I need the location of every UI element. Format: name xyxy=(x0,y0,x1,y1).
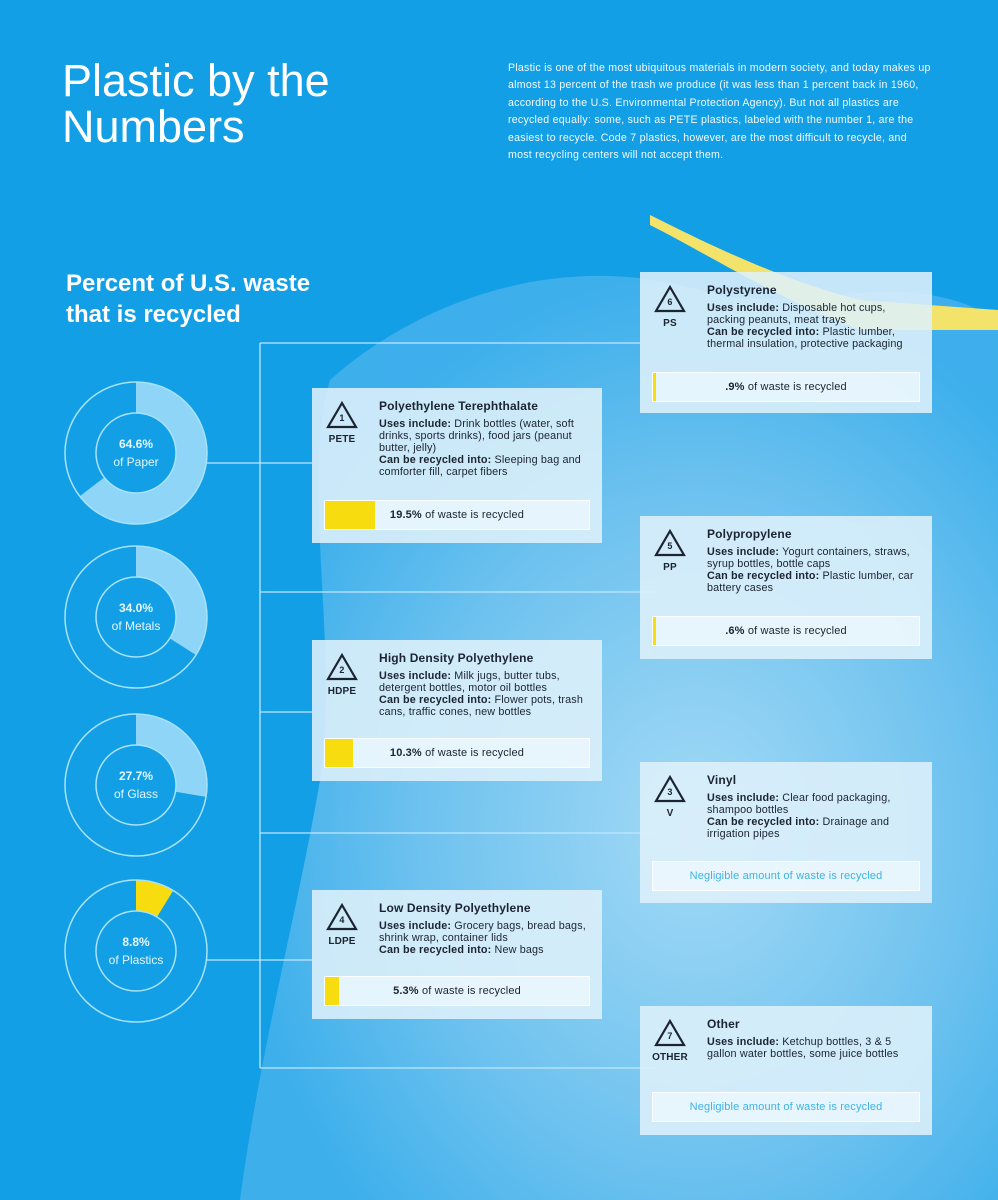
donut labels: of Paper xyxy=(113,455,159,469)
icon: recycle 1 xyxy=(326,401,358,445)
subheading: Percent of U.S. waste xyxy=(66,270,310,297)
card: PETE: Can be recycled into: Sleeping bag and comforter fill, carpet fibers xyxy=(379,454,581,478)
card: PS: Polystyrene xyxy=(707,283,777,297)
card: Vinyl: V xyxy=(667,808,673,819)
donut: metals xyxy=(65,546,207,688)
card: Other: 7 xyxy=(667,1031,673,1041)
icon: recycle 1: PETE xyxy=(329,434,355,445)
card: PS: PS xyxy=(663,318,677,329)
card: PP: 5 xyxy=(667,541,673,551)
text: of Plastics xyxy=(109,953,163,967)
bar: .9%: .9% of waste is recycled xyxy=(725,381,847,393)
card: PETE xyxy=(312,388,602,543)
card: HDPE: Can be recycled into: Flower pots, trash cans, traffic cones, new bottles xyxy=(379,694,583,718)
card: LDPE: 4 xyxy=(339,915,345,925)
card: LDPE: Low Density Polyethylene xyxy=(379,901,531,915)
donut labels xyxy=(113,437,159,469)
card: PETE: Polyethylene Terephthalate xyxy=(379,399,538,413)
card: Vinyl: Can be recycled into: Drainage and irrigation pipes xyxy=(707,816,889,840)
bar: .6% xyxy=(652,616,920,646)
card: PS xyxy=(640,272,932,413)
bar: negligible xyxy=(652,1092,920,1122)
bar: 5.3%: 5.3% of waste is recycled xyxy=(393,985,521,997)
bar: negligible: Negligible amount of waste is recycled xyxy=(690,1101,882,1113)
card: LDPE xyxy=(312,890,602,1019)
card: HDPE xyxy=(312,640,602,781)
card: Vinyl xyxy=(640,762,932,903)
bar: .9% xyxy=(652,372,920,402)
bar: 5.3% xyxy=(324,976,590,1006)
card: HDPE: HDPE xyxy=(328,686,356,697)
card: PP xyxy=(640,516,932,659)
text: 8.8% xyxy=(122,935,150,949)
card: PS: Uses include: Disposable hot cups, packing peanuts, meat trays xyxy=(707,302,886,326)
intro text: Plastic is one of the most ubiquitous materials in modern society, and today makes up almost 13 percent of the trash we produce (it was less than 1 percent back in 1960, according to the U.S. Environmental Protection Agency). But not all plastics are recycled equally: some, such as PETE plastics, labeled with the number 1, are the easiest to recycle. Code 7 plastics, however, are the most difficult to recycle, and most recycling centers will not accept them. xyxy=(508,62,931,161)
card: PP: Polypropylene xyxy=(707,527,792,541)
donut: plastics xyxy=(65,880,207,1022)
donut charts xyxy=(64,381,208,1023)
card: Other xyxy=(640,1006,932,1135)
card: Vinyl: Uses include: Clear food packaging, shampoo bottles xyxy=(707,792,890,816)
donut: glass xyxy=(65,714,207,856)
bar: 10.3%: 10.3% of waste is recycled xyxy=(390,747,524,759)
title: Plastic by the xyxy=(62,55,330,106)
card: Other: Other xyxy=(707,1017,740,1031)
icon: recycle 1: 1 xyxy=(339,413,345,423)
card: LDPE: Uses include: Grocery bags, bread bags, shrink wrap, container lids xyxy=(379,920,586,944)
card: PP: Can be recycled into: Plastic lumber, car battery cases xyxy=(707,570,914,594)
card: Vinyl: 3 xyxy=(667,787,673,797)
donut: paper xyxy=(65,382,207,524)
donut labels: 64.6% xyxy=(119,437,153,451)
card: PP: PP xyxy=(663,562,677,573)
card: HDPE: High Density Polyethylene xyxy=(379,651,533,665)
text: of Metals xyxy=(112,619,160,633)
text: 27.7% xyxy=(119,769,153,783)
card: HDPE: Uses include: Milk jugs, butter tubs, detergent bottles, motor oil bottles xyxy=(379,670,560,694)
bar: 19.5% xyxy=(324,500,590,530)
card: Vinyl: Vinyl xyxy=(707,773,736,787)
card: Other: OTHER xyxy=(652,1052,688,1063)
card: PP: Uses include: Yogurt containers, straws, syrup bottles, bottle caps xyxy=(707,546,910,570)
card: HDPE: 2 xyxy=(339,665,345,675)
card: PETE: Uses include: Drink bottles (water, soft drinks, sports drinks), food jars (peanut butter, jelly) xyxy=(379,418,574,454)
bar: negligible: Negligible amount of waste is recycled xyxy=(690,870,882,882)
text: 34.0% xyxy=(119,601,153,615)
card: PS: 6 xyxy=(667,297,673,307)
bar: 19.5%: 19.5% of waste is recycled xyxy=(390,509,524,521)
bar: 10.3% xyxy=(324,738,590,768)
card: LDPE: LDPE xyxy=(328,936,356,947)
title: Numbers xyxy=(62,101,245,152)
bar: .6%: .6% of waste is recycled xyxy=(725,625,847,637)
bar: negligible xyxy=(652,861,920,891)
subheading xyxy=(66,270,310,328)
card: Other: Uses include: Ketchup bottles, 3 & 5 gallon water bottles, some juice bottles xyxy=(707,1036,898,1060)
title xyxy=(62,55,330,152)
card: PS: Can be recycled into: Plastic lumber, thermal insulation, protective packaging xyxy=(707,326,903,350)
card: LDPE: Can be recycled into: New bags xyxy=(379,944,544,956)
subheading: that is recycled xyxy=(66,301,241,328)
text: of Glass xyxy=(114,787,158,801)
